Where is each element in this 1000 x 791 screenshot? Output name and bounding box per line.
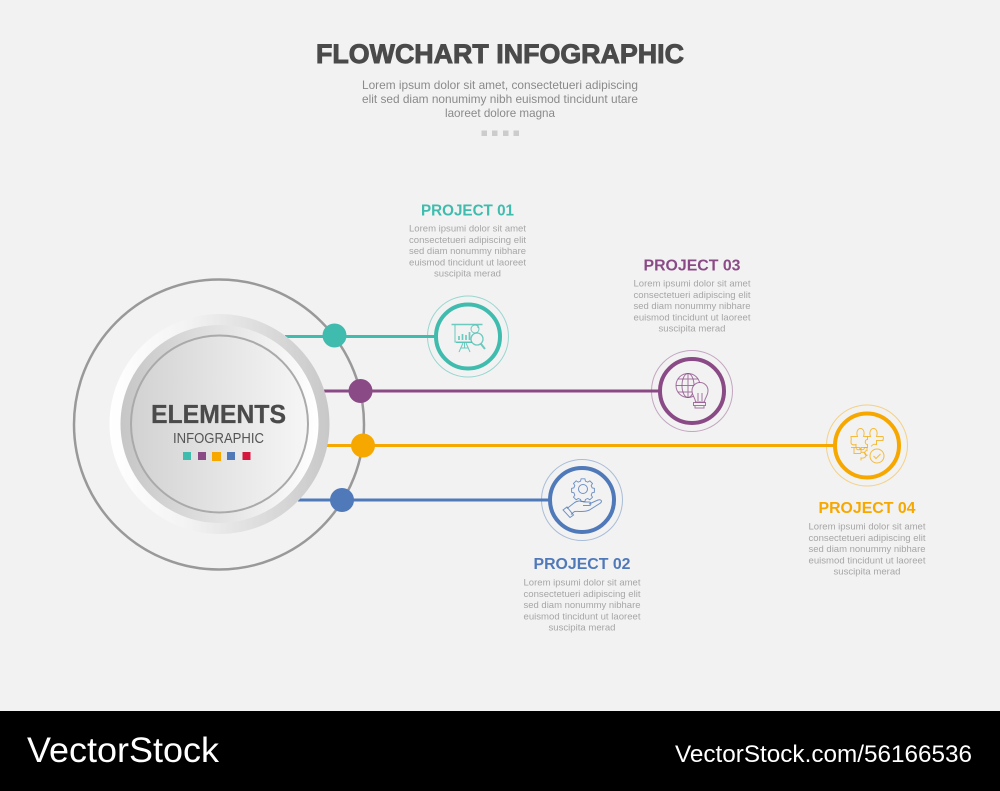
project 03 text [634,258,751,335]
project 02 text [524,556,641,634]
project 04 body: euismod tincidunt ut laoreet [808,555,926,566]
project 02 heading: PROJECT 02 [534,556,631,573]
node dot: project 01 [322,324,346,348]
node dot: project 04 [351,434,375,458]
project 03 body: sed diam nonummy nibhare [634,301,750,312]
node dot: project 02 [330,488,354,512]
project 02 body: euismod tincidunt ut laoreet [524,611,641,622]
icon: presentation board with magnifier [452,324,485,352]
outer circle [74,280,364,570]
icon: globe and light bulb [676,374,708,408]
project 04 body: consectetueri adipiscing elit [808,533,926,544]
project 02 body: consectetueri adipiscing elit [524,589,641,600]
connector: project 01 [285,335,436,338]
project 01 text [409,202,526,280]
project 04 body [808,522,926,578]
project 01 body [409,224,526,280]
project 02 body: Lorem ipsumi dolor sit amet [524,578,641,588]
project 03 node [652,350,732,432]
project 01 body: Lorem ipsumi dolor sit amet [409,224,526,234]
project 01 node [428,296,508,377]
node dot: project 03 [348,379,372,403]
connector: project 04 [326,444,835,447]
project 04 text [808,500,926,578]
intro text: Lorem ipsum dolor sit amet, consectetueri adipiscing [362,78,638,92]
project 03 body [634,278,751,335]
project 04 body: sed diam nonummy nibhare [808,544,926,555]
project 03 body: consectetueri adipiscing elit [634,290,751,301]
title dots [482,130,519,136]
project 04 body: Lorem ipsumi dolor sit amet [808,522,926,532]
icon: puzzle pieces with check [851,428,884,463]
badge subheading: INFOGRAPHIC [173,430,264,447]
project 03 body: suscipita merad [658,324,726,335]
badge colour squares [183,452,250,461]
intro text [362,78,638,120]
project 02 body: suscipita merad [548,623,616,634]
project 02 node [542,460,622,540]
project 01 body: consectetueri adipiscing elit [409,235,526,246]
footer url: VectorStock.com/56166536 [675,741,972,768]
badge heading: ELEMENTS [151,399,286,429]
project 03 body: Lorem ipsumi dolor sit amet [634,278,751,290]
project 04 body: suscipita merad [834,567,900,578]
project 01 body: suscipita merad [434,269,501,280]
project 02 body: sed diam nonummy nibhare [524,600,640,611]
title: FLOWCHART INFOGRAPHIC [316,39,684,69]
project 01 body: sed diam nonummy nibhare [409,246,526,257]
project 02 body [524,578,641,634]
project 03 heading: PROJECT 03 [644,258,741,274]
intro text: laoreet dolore magna [445,106,555,120]
project 01 body: euismod tincidunt ut laoreet [409,257,526,268]
intro text: elit sed diam nonumimy nibh euismod tincidunt utare [362,92,638,106]
footer bar [0,711,1000,791]
central badge [110,314,330,534]
connector: project 02 [298,498,550,502]
project 03 body: euismod tincidunt ut laoreet [634,312,751,323]
project 04 heading: PROJECT 04 [818,500,916,517]
project 01 heading: PROJECT 01 [421,202,514,220]
footer brand: VectorStock [27,731,220,770]
connector: project 03 [323,390,660,392]
icon: hand holding gear [563,479,601,518]
project 04 node [826,405,908,486]
